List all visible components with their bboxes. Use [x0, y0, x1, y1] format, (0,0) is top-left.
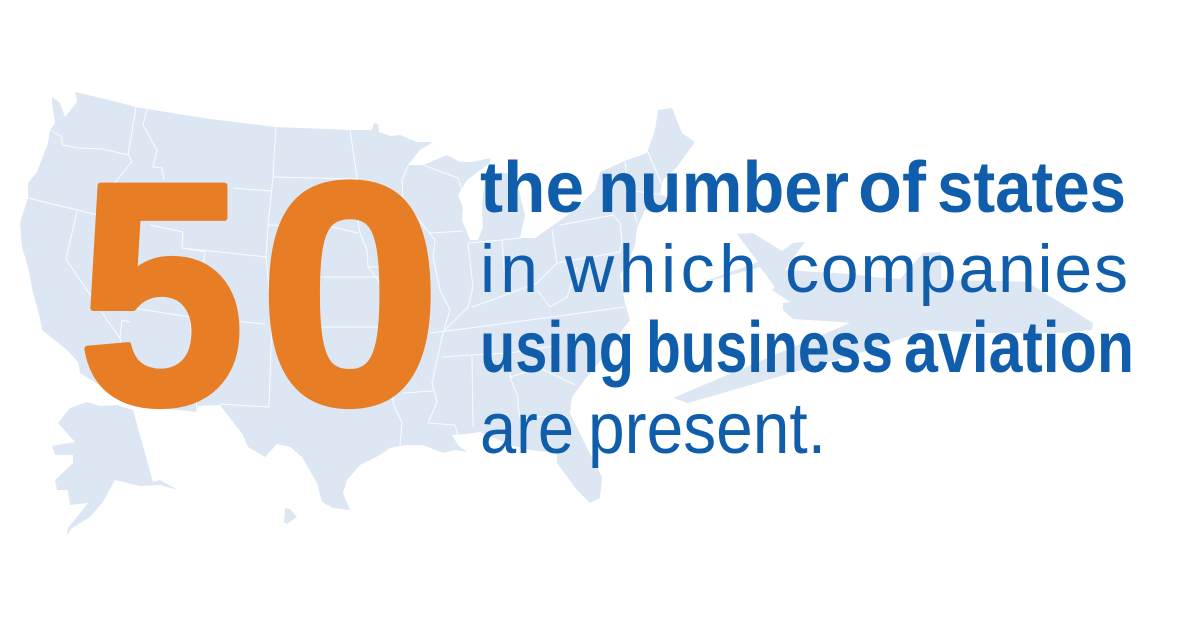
- line 2: in which companies: which: [564, 231, 757, 307]
- big number: 50: [78, 117, 441, 470]
- line 4: are present.: [480, 389, 826, 469]
- line 4: are present.: are: [480, 389, 574, 469]
- line 1: the number of states: number: [598, 148, 849, 228]
- mainland states silhouette: [20, 92, 695, 510]
- line 3: using business aviation: using: [480, 308, 634, 388]
- line 1: the number of states: [480, 148, 1126, 228]
- line 2: in which companies: companies: [785, 231, 1128, 307]
- digit 5: 5: [78, 117, 245, 470]
- line 4: are present.: present.: [588, 389, 826, 469]
- Hawaii: [284, 508, 297, 524]
- line 3: using business aviation: business: [646, 308, 893, 388]
- Alaska: [52, 402, 178, 535]
- state border lines: [28, 107, 677, 445]
- line 1: the number of states: states: [937, 148, 1126, 228]
- airplane silhouette: [673, 233, 1093, 403]
- digit 0: 0: [259, 117, 441, 470]
- description text: [480, 148, 1134, 469]
- Long Island sound gap: [637, 220, 657, 232]
- map of the United States: [20, 92, 695, 535]
- line 2: in which companies: [480, 231, 1128, 307]
- line 2: in which companies: in: [480, 231, 538, 307]
- line 1: the number of states: the: [480, 148, 584, 228]
- line 3: using business aviation: aviation: [904, 308, 1134, 388]
- line 3: using business aviation: [480, 308, 1134, 388]
- line 1: the number of states: of: [858, 148, 927, 228]
